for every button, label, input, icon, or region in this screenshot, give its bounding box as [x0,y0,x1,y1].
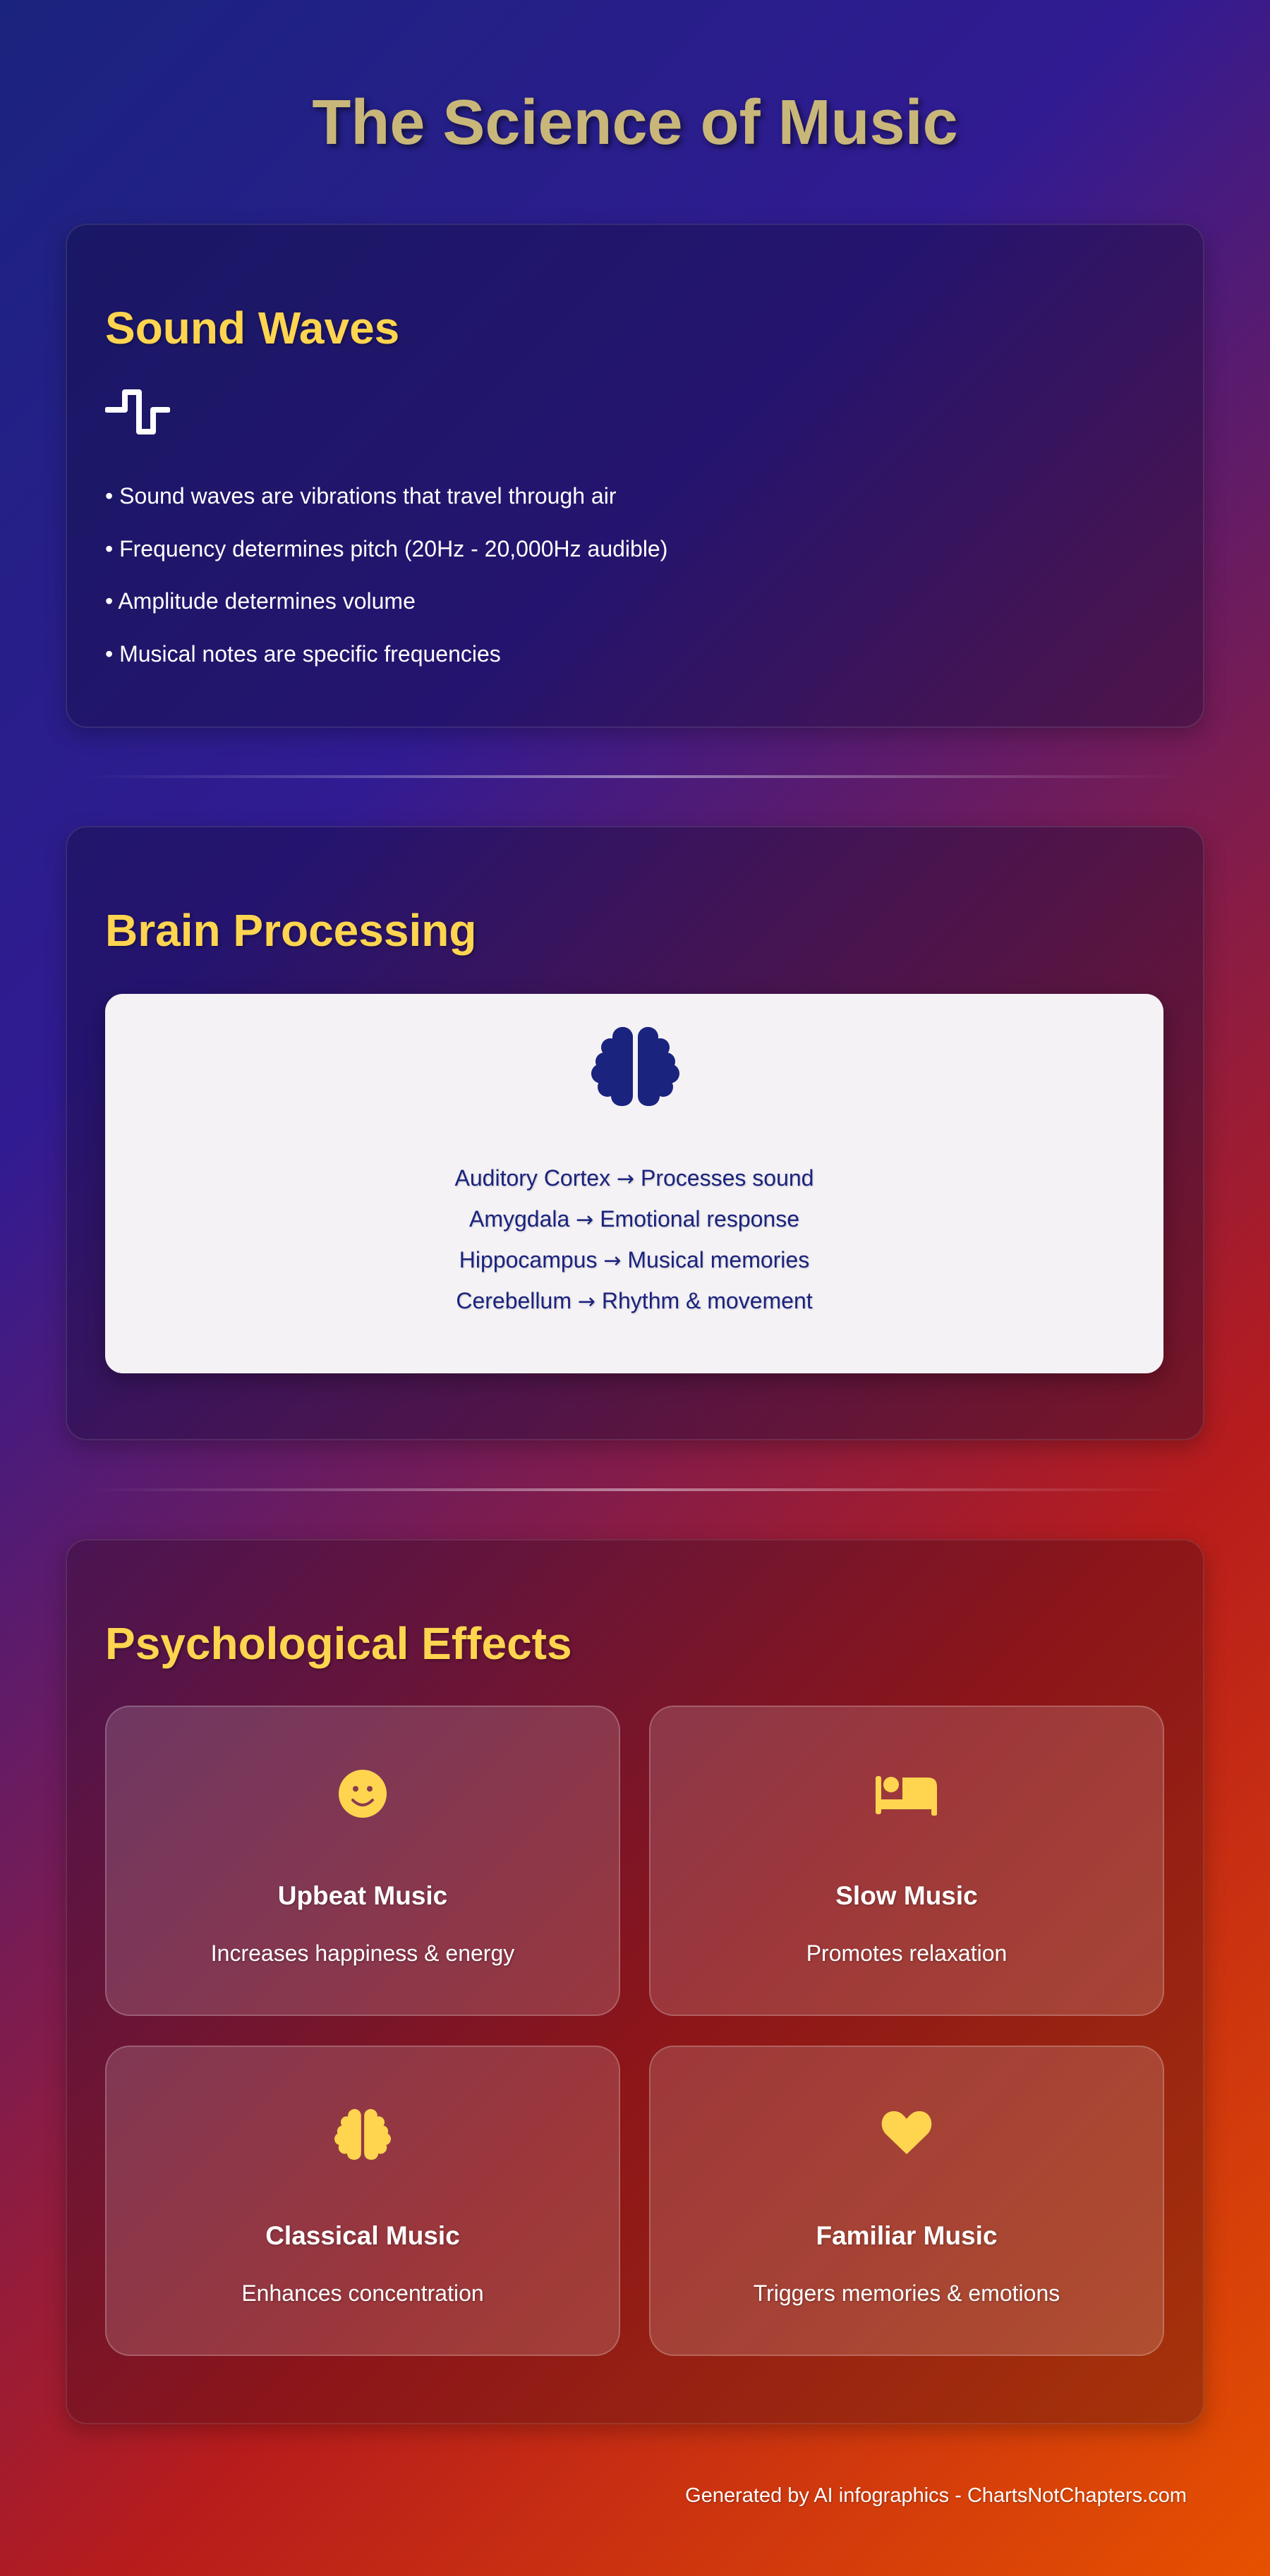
card: slow music [649,1706,1164,2016]
bullet list: • Musical notes are specific frequencies [105,641,501,667]
card title: Classical Music [265,2221,460,2250]
bullet list: • Frequency determines pitch (20Hz - 20,000Hz audible) [105,536,667,561]
card: familiar music [649,2046,1164,2356]
icon: brain [591,1027,679,1106]
heading: brain processing: Brain Processing [105,905,476,956]
footer: Generated by AI infographics - ChartsNotChapters.com [685,2484,1187,2507]
card title: Upbeat Music [278,1881,447,1910]
brain region lines: Amygdala → Emotional response [469,1206,799,1232]
panel: psychological effects [66,1539,1204,2424]
card description: Triggers memories & emotions [754,2280,1060,2306]
white box: brain regions [105,994,1163,1373]
bullet list [105,483,667,667]
heading: sound waves: Sound Waves [105,303,399,353]
icon: smiley [339,1770,387,1818]
panel: brain processing [66,826,1204,1440]
icon: square wave [105,389,170,435]
bullet list: • Sound waves are vibrations that travel through air [105,483,616,509]
bullet list: • Amplitude determines volume [105,588,416,614]
card description: Enhances concentration [241,2280,484,2306]
panel: sound waves [66,224,1204,728]
brain region lines [454,1165,814,1315]
card: classical music [105,2046,620,2356]
brain region lines: Hippocampus → Musical memories [459,1247,809,1273]
title: The Science of Music [312,87,958,158]
heading: psychological effects: Psychological Effects [105,1618,572,1669]
brain region lines: Auditory Cortex → Processes sound [455,1165,814,1191]
card: upbeat music [105,1706,620,2016]
card title: Familiar Music [816,2221,998,2250]
card description: Promotes relaxation [806,1940,1007,1966]
card title: Slow Music [835,1881,978,1910]
card description: Increases happiness & energy [211,1940,514,1966]
brain region lines: Cerebellum → Rhythm & movement [456,1288,813,1314]
icon: heart [882,2111,931,2154]
icon: brain [334,2109,391,2160]
icon: bed [876,1776,937,1816]
